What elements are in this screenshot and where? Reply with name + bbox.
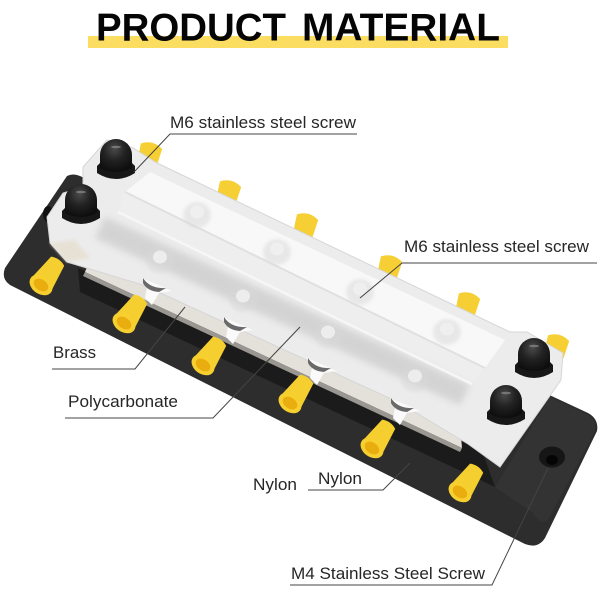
callout: Polycarbonate xyxy=(65,327,300,418)
title highlight bar xyxy=(88,36,508,48)
front yellow connectors xyxy=(26,252,488,507)
callout: Polycarbonate: Polycarbonate xyxy=(68,392,178,411)
callout: M6 stainless steel screw right: M6 stainless steel screw xyxy=(404,237,590,256)
rear yellow connectors xyxy=(136,140,570,358)
base plate recessed channel xyxy=(78,268,495,487)
cover studs xyxy=(146,202,461,392)
brass bar xyxy=(85,260,462,448)
cover ridge line xyxy=(125,192,485,368)
title text: MATERIAL xyxy=(302,6,500,50)
callout: M6 stainless steel screw top xyxy=(134,113,357,172)
callout: Brass xyxy=(52,307,185,369)
label: Nylon plain: Nylon xyxy=(253,475,297,494)
callout: M6 stainless steel screw top: M6 stainless steel screw xyxy=(170,113,357,132)
callout: Nylon: Nylon xyxy=(318,469,362,488)
cover lower channel frosted xyxy=(95,217,470,405)
callout: M4 Stainless Steel Screw: M4 Stainless Steel Screw xyxy=(291,564,486,583)
cover end block shading xyxy=(50,240,90,262)
translucent polycarbonate cover xyxy=(47,140,563,467)
callout: Nylon xyxy=(308,463,410,490)
base plate raised right end xyxy=(495,397,595,522)
black cap nuts xyxy=(62,139,553,425)
callout: M4 Stainless Steel Screw xyxy=(290,468,548,585)
callout: Brass: Brass xyxy=(53,343,96,362)
title text: PRODUCT xyxy=(96,6,286,50)
base mounting hole right xyxy=(539,446,565,468)
cover upper face xyxy=(125,172,505,368)
black nylon base plate xyxy=(4,174,597,546)
title xyxy=(88,6,508,50)
cover second band xyxy=(118,192,485,385)
metal terminal clips xyxy=(142,278,420,425)
base mounting hole left xyxy=(43,206,53,222)
callout: M6 stainless steel screw right xyxy=(360,237,597,298)
product: bus bar xyxy=(4,139,597,546)
